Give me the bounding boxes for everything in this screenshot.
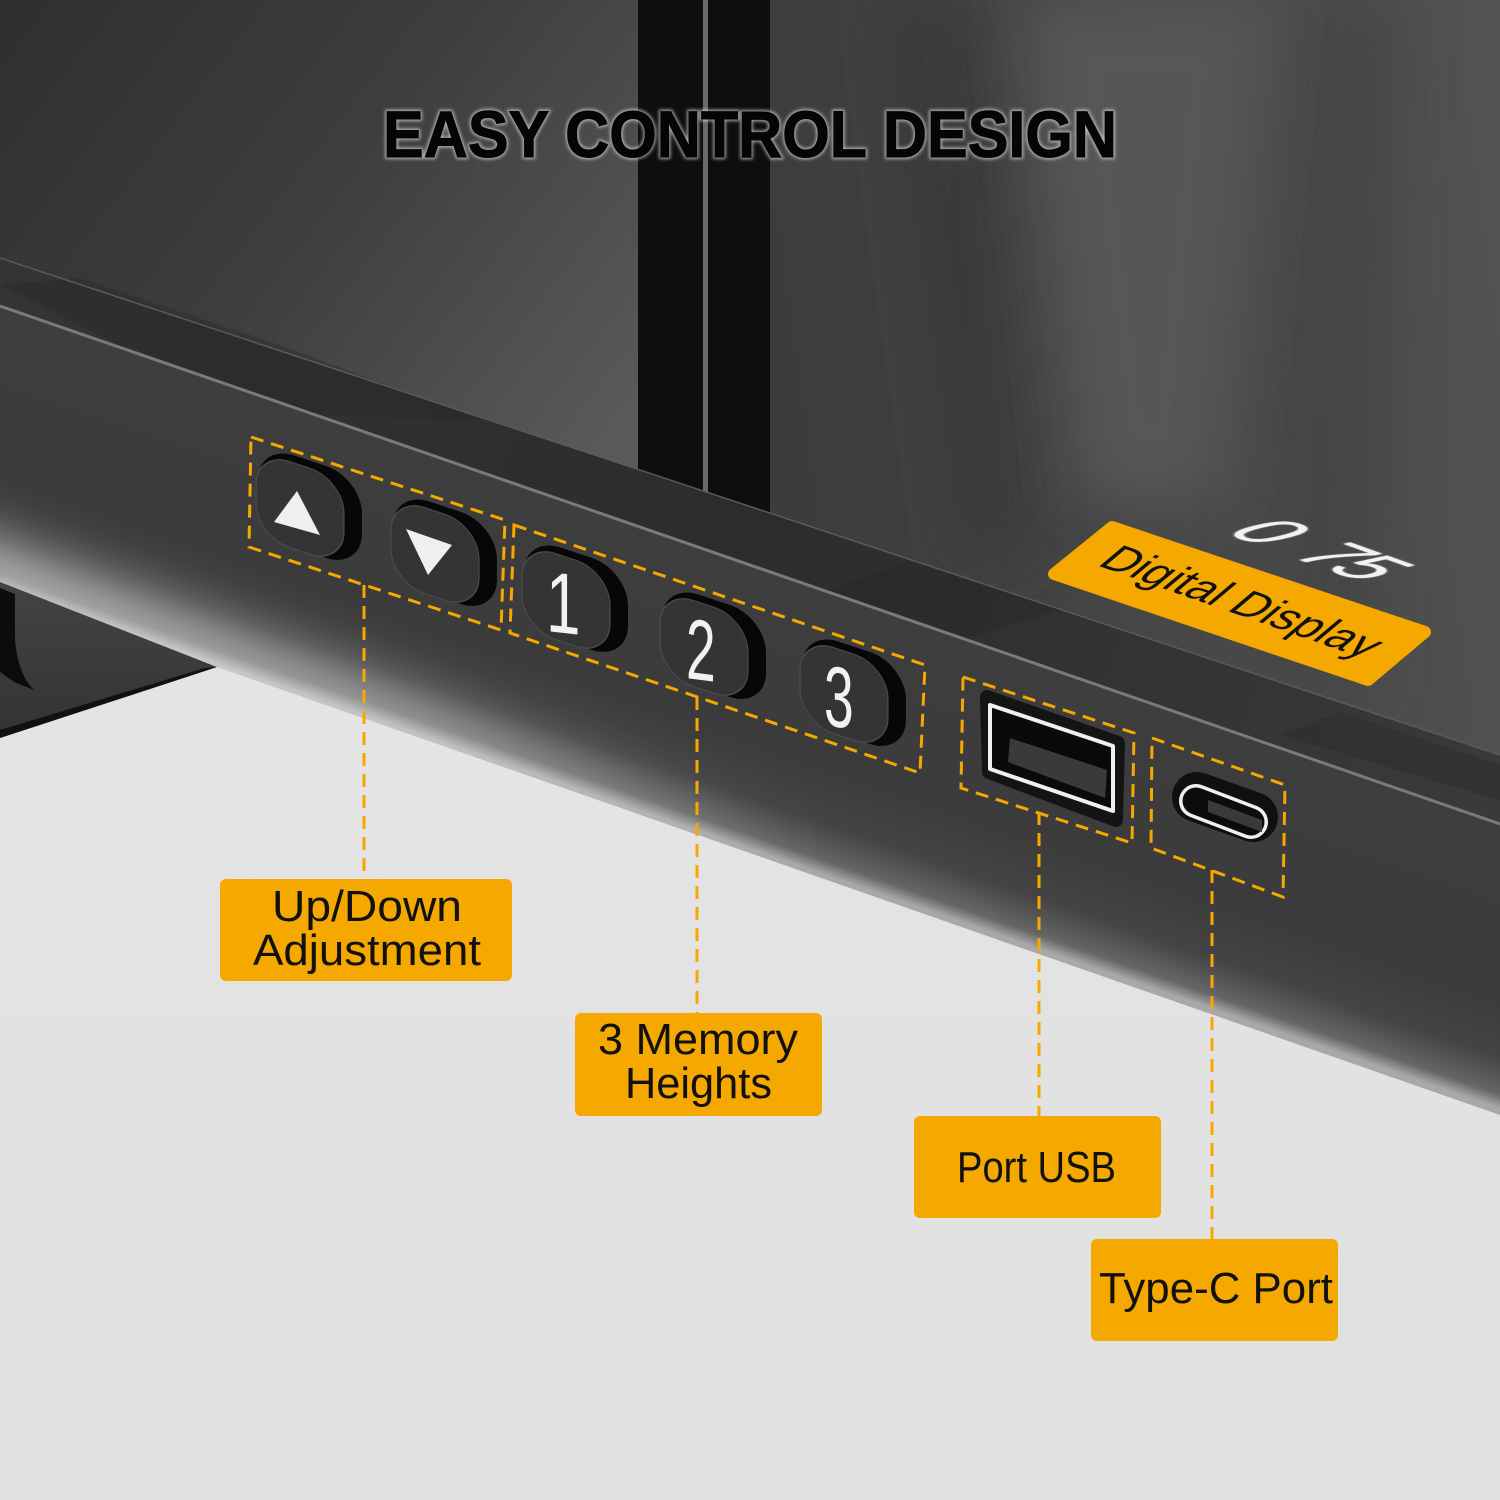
label: port USB bbox=[914, 1116, 1161, 1218]
background: wall left bbox=[0, 0, 640, 520]
dashed box: Type-C port bbox=[1151, 738, 1285, 897]
label: 3 memory heights: Heights bbox=[625, 1059, 772, 1108]
desk front face bbox=[0, 306, 1500, 1115]
connector: USB bbox=[1038, 812, 1040, 1116]
label: up/down adjustment bbox=[220, 879, 512, 981]
label: up/down adjustment: Adjustment bbox=[253, 926, 481, 975]
connector: memory bbox=[696, 697, 698, 1013]
label: 3 memory heights bbox=[575, 1013, 822, 1116]
title: EASY CONTROL DESIGN bbox=[383, 97, 1117, 171]
digital display readout: 075 bbox=[1203, 513, 1438, 586]
desk top surface bbox=[0, 258, 1500, 826]
button: memory 2 bbox=[660, 582, 766, 709]
label: digital display bbox=[1054, 527, 1425, 680]
connector: up/down bbox=[362, 585, 366, 879]
label: Type-C port: Type-C Port bbox=[1099, 1264, 1333, 1313]
desk post bbox=[638, 0, 770, 520]
icon: Type-C port bbox=[1196, 797, 1262, 832]
label: up/down adjustment: Up/Down bbox=[272, 882, 462, 931]
title: EASY CONTROL DESIGN bbox=[383, 97, 1117, 171]
label: 3 memory heights: 3 Memory bbox=[598, 1015, 798, 1064]
desk underside block bbox=[0, 580, 217, 738]
button: memory 1 bbox=[522, 536, 628, 662]
label: Type-C port bbox=[1091, 1239, 1338, 1341]
button: memory 1: 1 bbox=[546, 553, 580, 653]
dashed box: memory buttons bbox=[510, 525, 925, 773]
button: up bbox=[256, 444, 362, 570]
button: memory 3 bbox=[800, 630, 906, 756]
button: down bbox=[391, 490, 497, 616]
dashed box: up/down buttons bbox=[249, 437, 505, 630]
label: digital display: Digital Display bbox=[1088, 538, 1397, 666]
dashed box: USB port bbox=[961, 677, 1134, 843]
icon: USB port bbox=[987, 697, 1118, 820]
background: wall right bbox=[770, 0, 1500, 800]
button: memory 3: 3 bbox=[824, 648, 854, 748]
button: memory 2: 2 bbox=[686, 601, 716, 701]
label: port USB: Port USB bbox=[957, 1143, 1116, 1192]
connector: Type-C bbox=[1210, 870, 1214, 1239]
